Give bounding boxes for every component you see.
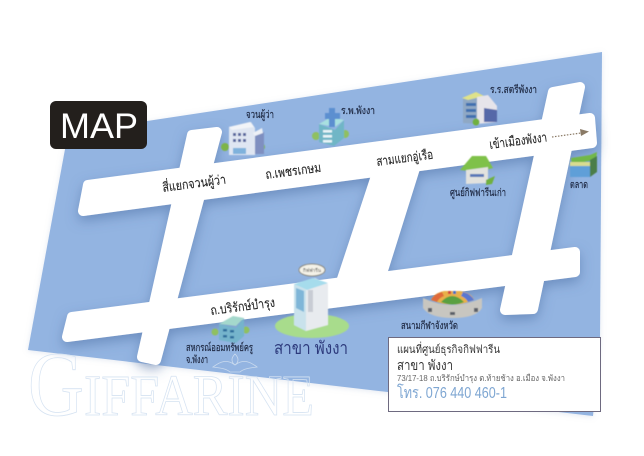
icon: hospital (312, 108, 349, 146)
heading: MAP badge: MAP (60, 107, 138, 146)
road: right vertical (505, 87, 580, 310)
label: branch name: สาขา พังงา (274, 338, 348, 358)
label: old Giffarine centre: ศูนย์กิฟฟารีนเก่า (450, 186, 506, 199)
road label: into town: เข้าเมืองพังงา (488, 130, 548, 152)
callout address: 73/17-18 ถ.บริรักษ์บำรุง ต.ท้ายช้าง อ.เมือง จ.พังงา (397, 373, 565, 384)
road label: intersection: สี่แยกจวนผู้ว่า (161, 171, 227, 196)
road: left vertical (142, 132, 217, 360)
arrow: into town (552, 129, 589, 137)
icon: teachers cooperative (212, 316, 250, 343)
label: market: ตลาด (570, 179, 588, 191)
icon: governor residence (221, 122, 265, 155)
label: teachers cooperative: สหกรณ์ออมทรัพย์ครู (186, 341, 253, 354)
callout title: แผนที่ศูนย์ธุรกิจกิฟฟารีน (397, 341, 500, 356)
road: Borirak Bamrung road (67, 252, 575, 337)
road network (67, 87, 592, 360)
icon: old Giffarine centre (460, 156, 495, 185)
icon: branch tower (275, 264, 349, 338)
panel: blue map background (28, 52, 602, 416)
callout: branch information box (388, 338, 600, 412)
callout phone: โทร. 076 440 460-1 (397, 383, 507, 402)
watermark: Giffarine logo: G (28, 333, 84, 435)
heading: MAP badge (50, 101, 147, 149)
label: governor residence: จวนผู้ว่า (246, 109, 274, 121)
icon: provincial stadium (423, 291, 482, 318)
label: provincial stadium: สนามกีฬาจังหวัด (401, 319, 458, 332)
label: teachers cooperative: จ.พังงา (186, 354, 208, 366)
label: hospital: ร.พ.พังงา (341, 105, 375, 117)
icon: market (570, 152, 597, 177)
watermark: Giffarine logo: IFFARINE (84, 363, 314, 428)
icon: girls school (462, 92, 497, 126)
label: girls school: ร.ร.สตรีพังงา (490, 83, 537, 96)
callout branch name: สาขา พังงา (397, 357, 453, 373)
icon: branch tower: กิฟฟารีน (303, 267, 322, 274)
watermark: Giffarine logo (28, 333, 314, 435)
road: middle vertical (340, 165, 416, 285)
road label: Borirak Bamrung: ถ.บริรักษ์บำรุง (209, 295, 276, 319)
label: teachers cooperative (186, 341, 253, 366)
road label: Phetkasem: ถ.เพชรเกษม (264, 160, 322, 182)
road label: junction: สามแยกอู่เรือ (375, 147, 434, 170)
road: main Phetkasem road (83, 118, 592, 211)
